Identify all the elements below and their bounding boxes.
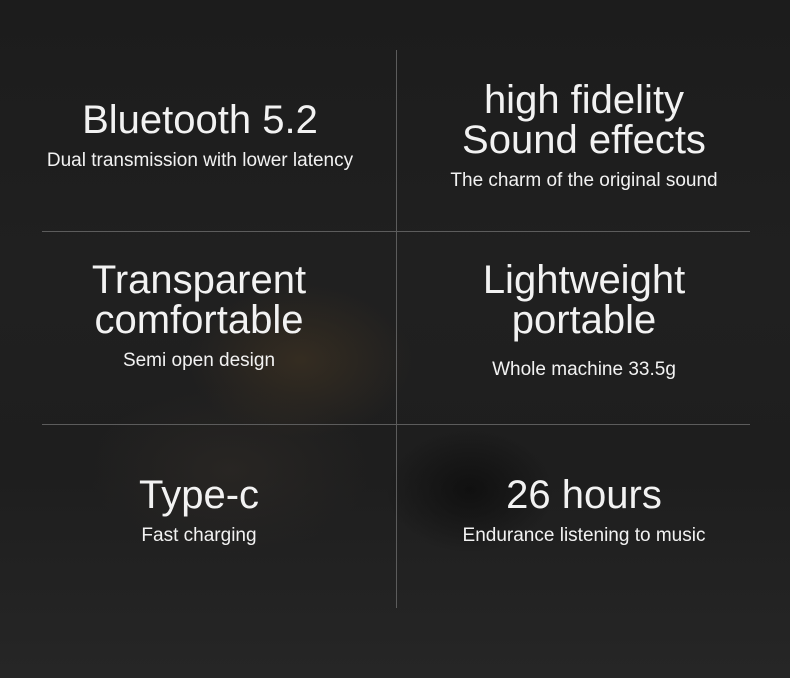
- heading: bluetooth: Bluetooth 5.2: [82, 98, 318, 142]
- block: hifi: [450, 78, 718, 191]
- text: lightweight sub: Whole machine 33.5g: [492, 359, 676, 380]
- heading: lightweight: Lightweight: [483, 258, 685, 302]
- text: hours sub: Endurance listening to music: [463, 525, 705, 546]
- block: lightweight: [483, 258, 685, 380]
- heading: transparent: [92, 258, 306, 342]
- heading: transparent: Transparent: [92, 258, 306, 302]
- text: type-c sub: Fast charging: [141, 525, 257, 546]
- heading: hifi: high fidelity: [484, 78, 684, 122]
- block: bluetooth: [47, 98, 354, 171]
- block: transparent: [92, 258, 306, 371]
- heading: hours: 26 hours: [506, 473, 662, 517]
- text: hifi sub: The charm of the original sound: [450, 170, 718, 191]
- block: type-c: [139, 473, 259, 546]
- heading: lightweight: [483, 258, 685, 342]
- text: bluetooth sub: Dual transmission with lower latency: [47, 150, 353, 171]
- heading: hifi: Sound effects: [462, 118, 706, 162]
- block: hours: [463, 473, 705, 546]
- heading: lightweight: portable: [512, 298, 656, 342]
- text: transparent sub: Semi open design: [123, 350, 275, 371]
- heading: transparent: comfortable: [94, 298, 303, 342]
- heading: type-c: Type-c: [139, 473, 259, 517]
- heading: hifi: [462, 78, 706, 162]
